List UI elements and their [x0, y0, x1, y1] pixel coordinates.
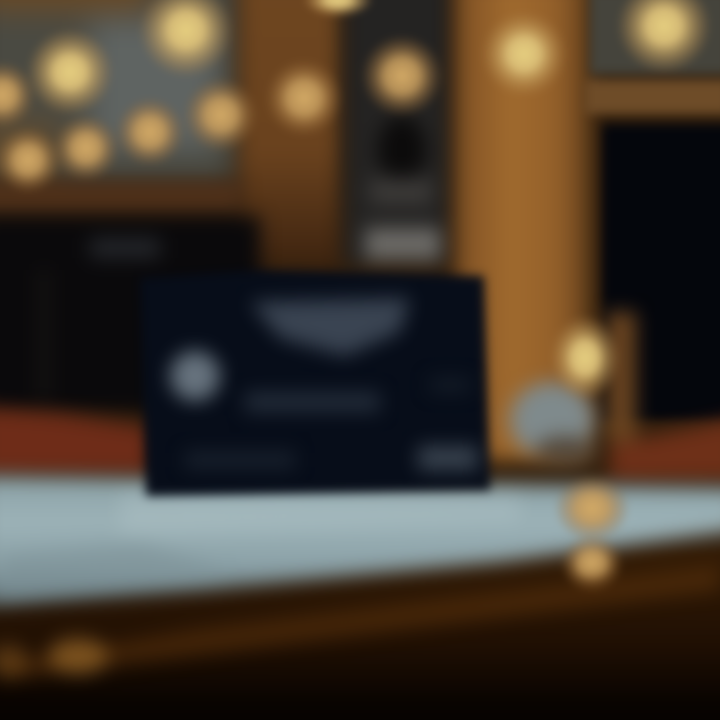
candle light, right [549, 314, 621, 402]
warm reflections on bar front [0, 565, 720, 680]
card heading glow [250, 298, 410, 356]
window panel with grey tones, top left [0, 0, 240, 185]
lower wooden bar front [0, 550, 720, 720]
dark doorway, right [602, 124, 720, 420]
top right grey panel and beam [585, 0, 720, 114]
wood column, centre right [456, 0, 590, 460]
reflections on counter [554, 474, 630, 594]
bokeh lights, top centre and right [302, 0, 712, 118]
glass bowl, right of card [510, 382, 595, 464]
dark tower, centre [345, 0, 450, 265]
card emblem [170, 351, 220, 401]
dark cabinet, left [0, 216, 260, 412]
dark card [140, 270, 490, 496]
red leather band, right [606, 312, 720, 480]
marble counter [0, 476, 720, 606]
wood column, centre left [240, 0, 340, 265]
wooden shelf, left [0, 182, 242, 214]
bokeh lights, top left group [0, 0, 344, 194]
card text lines [185, 378, 478, 470]
marble veins and highlights [0, 494, 520, 598]
red leather band, left [0, 408, 150, 474]
